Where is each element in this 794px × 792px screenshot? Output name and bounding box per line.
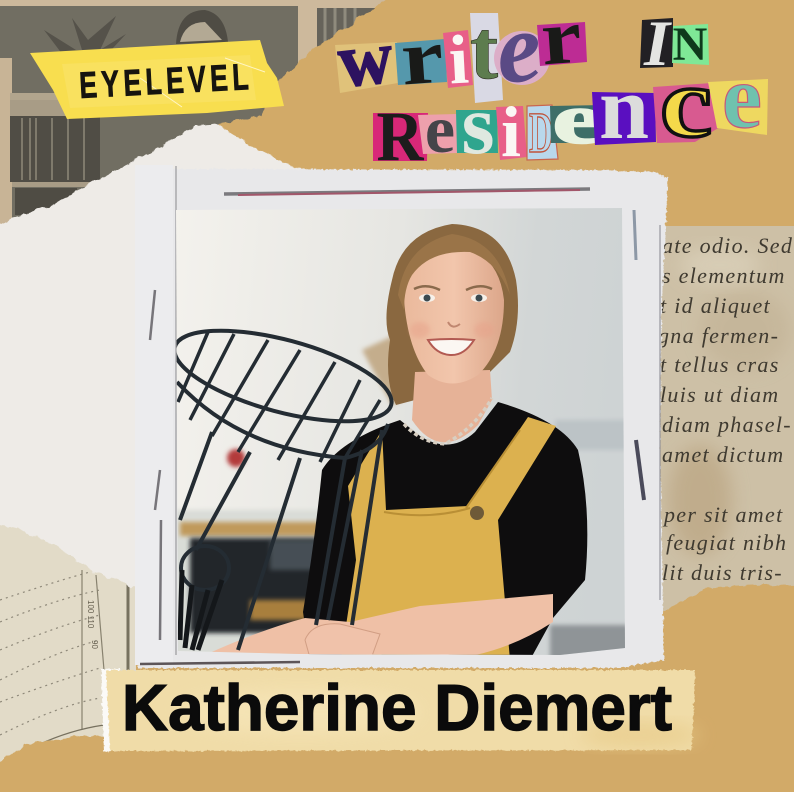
newspaper text scrap, right <box>645 226 794 611</box>
word: residence: s <box>461 78 495 172</box>
face <box>398 234 510 384</box>
newspaper text scrap, right: ate odio. Sed <box>662 233 793 258</box>
word: writer: w <box>334 15 397 104</box>
black shirt <box>303 402 587 660</box>
necklace <box>404 398 492 444</box>
graph paper scrap, lower left <box>0 500 136 770</box>
hair back <box>386 224 518 405</box>
newspaper text scrap, right: s elementum <box>662 263 786 288</box>
graph paper scrap, lower left: 90 <box>90 640 99 649</box>
word: in: I <box>643 8 673 80</box>
graph paper scrap, lower left: 100 110 <box>86 600 95 629</box>
neck and chest <box>412 370 492 442</box>
word: residence: e <box>425 91 455 167</box>
newspaper text scrap, right: t id aliquet <box>660 293 771 318</box>
newspaper text scrap, right: diam phasel- <box>662 412 792 437</box>
newspaper text scrap, right: lit duis tris- <box>662 560 783 585</box>
word: writer <box>334 0 587 105</box>
vintage book photo, top left <box>0 0 400 240</box>
word: residence: n <box>599 59 649 158</box>
word: residence: e <box>552 79 604 159</box>
torn kraft layer, lower right <box>640 584 794 792</box>
word: writer: t <box>470 3 498 97</box>
logo text: EYELEVEL <box>78 56 254 106</box>
torn white paper, left <box>0 124 340 590</box>
newspaper text scrap, right: luis ut diam <box>660 382 780 407</box>
forearms and hand <box>212 594 553 655</box>
newspaper text scrap, right: gna fermen- <box>658 323 779 348</box>
wire basket <box>176 328 394 651</box>
word: residence: c <box>660 47 712 158</box>
studio background <box>170 205 630 660</box>
word: residence: i <box>501 92 521 172</box>
word: writer: i <box>447 22 471 99</box>
portrait photo <box>165 205 630 665</box>
newspaper text scrap, right: feugiat nibh <box>666 530 787 555</box>
word: residence <box>373 47 768 176</box>
word: residence: e <box>722 48 762 147</box>
name: Katherine Diemert <box>122 671 672 744</box>
name band <box>101 669 700 752</box>
word: in: N <box>673 18 708 71</box>
ransom title <box>334 0 768 176</box>
torn kraft layer, top right <box>218 0 794 236</box>
newspaper text scrap, right: per sit amet <box>662 502 783 527</box>
word: residence: R <box>376 98 424 176</box>
word: residence: D <box>529 100 553 165</box>
torn kraft layer, bottom <box>0 735 150 792</box>
word: in <box>640 8 709 80</box>
logo tape <box>30 40 284 119</box>
word: writer: r <box>398 12 446 101</box>
white photo frame <box>135 165 668 668</box>
yellow overalls <box>340 417 556 665</box>
newspaper text scrap, right: amet dictum <box>662 442 784 467</box>
newspaper text scrap, right: t tellus cras <box>660 352 780 377</box>
